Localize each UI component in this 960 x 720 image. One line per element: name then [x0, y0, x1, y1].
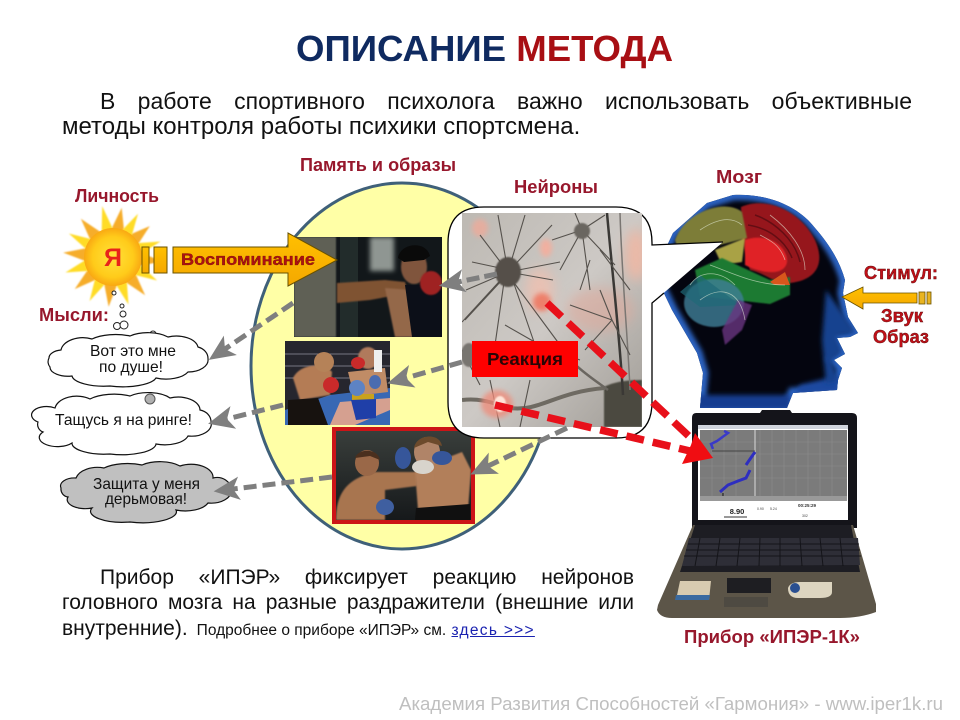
arrowhead: red [682, 433, 713, 464]
arrow: recollection [142, 233, 337, 286]
laptop screen chart: 5.24 [770, 507, 777, 511]
label: stimulus: Образ [873, 327, 929, 347]
panel: memory ellipse [251, 183, 553, 549]
arrow: neurons to photo 1 [458, 274, 497, 282]
cloud: thought 1 [48, 331, 208, 387]
intro text: В работе спортивного психолога важно использовать объективные [100, 88, 912, 114]
thought bubbles [112, 291, 128, 330]
laptop screen chart: 00:25:29 [798, 503, 817, 508]
label: stimulus [864, 263, 938, 347]
laptop screen chart [698, 425, 848, 518]
brain: red lobe [741, 203, 819, 283]
arrow: photo 2 to cloud 2 [227, 405, 283, 419]
arrow: photo 1 to cloud 1 [225, 303, 293, 349]
label box: reaction [472, 341, 578, 377]
brain: pale blue cerebellum [684, 279, 744, 327]
bottom text: внутренние). Подробнее о приборе «ИПЭР» см. здесь >>> [62, 617, 535, 640]
laptop device [657, 410, 876, 618]
laptop screen chart: 8.90 [730, 507, 744, 516]
photo: boxer under attack, red frame [334, 429, 473, 522]
brain: purple stem [722, 300, 752, 345]
label: device: Прибор «ИПЭР-1К» [684, 627, 860, 647]
arrow: reaction to device 2 [495, 405, 690, 451]
label: thoughts: Мысли: [39, 305, 109, 325]
photo: neurons [461, 213, 647, 427]
footer: Академия Развития Способностей «Гармония» - www.iper1k.ru [399, 694, 943, 714]
label box: reaction: Реакция [487, 349, 563, 369]
cloud: thought 3: дерьмовая! [105, 491, 187, 508]
label: brain: Мозг [716, 167, 763, 187]
label: memory and images: Память и образы [300, 155, 456, 175]
cloud: thought 3 [61, 462, 231, 523]
laptop screen chart: 302 [802, 514, 808, 518]
label: neurons: Нейроны [514, 177, 598, 197]
bottom text: Прибор «ИПЭР» фиксирует реакцию нейронов [100, 566, 634, 589]
label: stimulus: Звук [881, 306, 924, 326]
arrow: neurons to photo 2 [406, 362, 462, 378]
laptop screen chart: 0.90 [757, 507, 764, 511]
arrow: recollection: Воспоминание [181, 250, 315, 269]
title: ОПИСАНИЕ МЕТОДА [296, 28, 673, 69]
intro text: методы контроля работы психики спортсмена. [62, 113, 580, 140]
cloud: thought 1: по душе! [99, 359, 163, 376]
arrow: neurons to photo 3 [488, 428, 567, 466]
bottom text [62, 566, 634, 640]
arrow: reaction to device 1 [547, 303, 693, 440]
cloud: thought 2: Тащусь я на ринге! [55, 412, 192, 429]
photo: boxer at punching bag [294, 237, 442, 337]
intro text [62, 88, 912, 140]
cloud: thought 3: Защита у меня [93, 476, 200, 493]
sun: personality: Я [104, 244, 122, 272]
brain: olive lobe [675, 207, 747, 250]
callout: neurons [448, 207, 723, 438]
stimulus arrow [842, 287, 931, 309]
cloud: thought 1: Вот это мне [90, 343, 176, 360]
bottom text: головного мозга на разные раздражители (внешние или [62, 591, 634, 614]
cloud: thought 2 [32, 393, 211, 455]
sun: personality [62, 205, 164, 308]
head with brain [660, 195, 858, 409]
brain: bright red core [745, 238, 787, 272]
photo: boxers in the ring [285, 341, 390, 425]
brain: green lobe [695, 258, 790, 304]
label: personality: Личность [75, 186, 159, 206]
arrow: photo 3 to cloud 3 [233, 477, 332, 489]
label: stimulus: Стимул: [864, 263, 938, 283]
